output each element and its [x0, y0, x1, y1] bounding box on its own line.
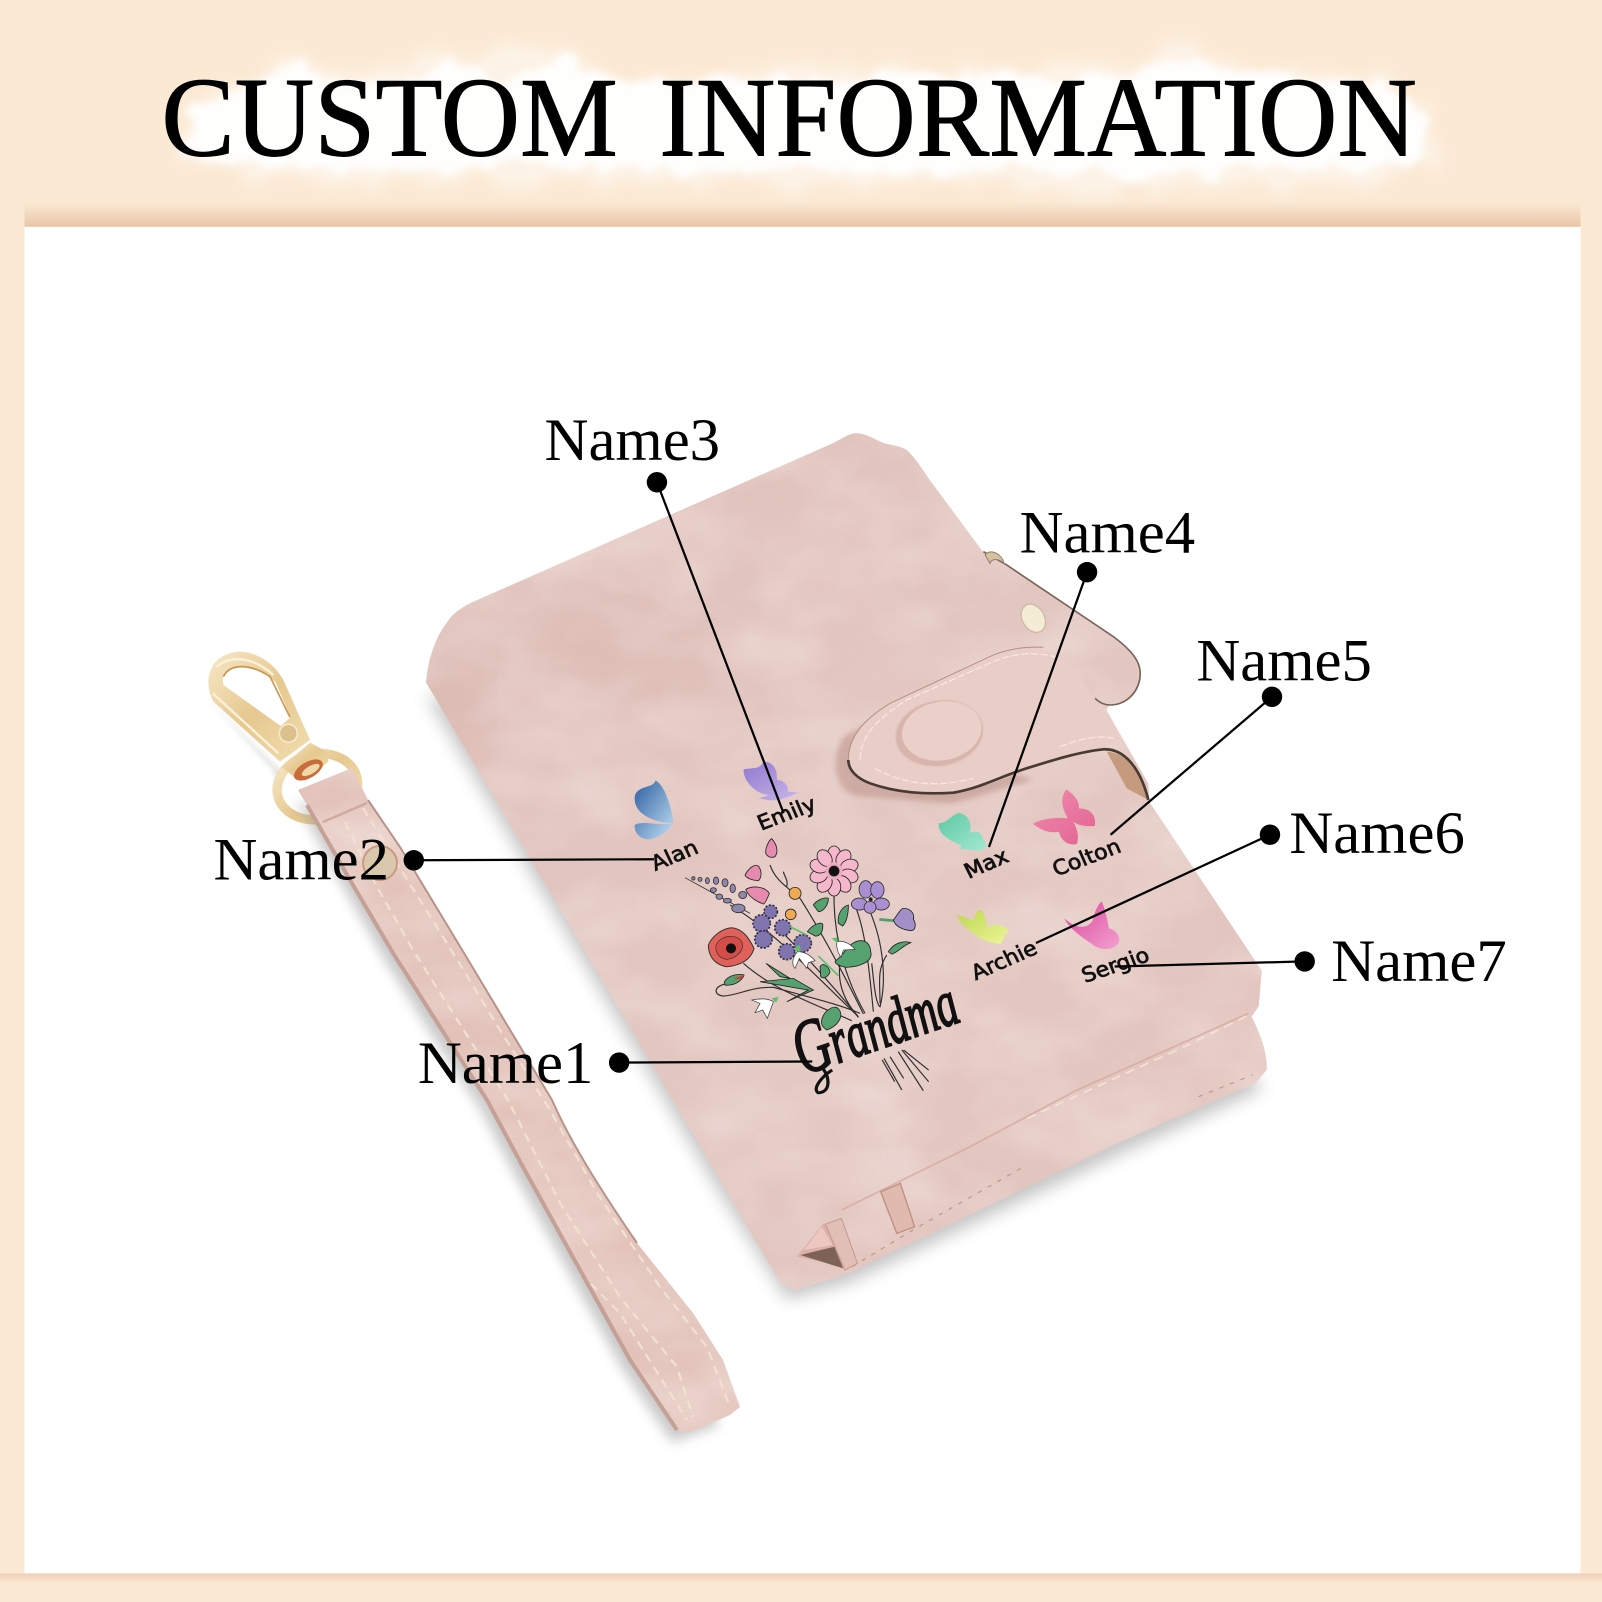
butterfly: Alan	[635, 781, 673, 839]
metal ring	[985, 552, 1004, 563]
title glow: white cloud	[184, 53, 1425, 176]
wallet shadow	[426, 695, 1263, 1300]
orange buds	[785, 887, 801, 920]
wallet body	[426, 433, 1267, 1290]
button	[897, 695, 986, 767]
snap hook	[208, 652, 310, 762]
butterfly: Archie	[957, 910, 1009, 944]
strap rivet	[363, 846, 397, 880]
leather texture	[419, 429, 1277, 1298]
rivet	[279, 724, 297, 742]
name: Colton: Colton	[1049, 835, 1125, 882]
gold clasp	[205, 652, 364, 827]
strap dark right edge	[368, 800, 637, 1243]
callout: Name7	[1115, 928, 1507, 995]
white snowdrops	[752, 941, 855, 1018]
callout: Name5: Name5	[1196, 627, 1372, 694]
callout: Name1: Name1	[418, 1030, 593, 1097]
wallet	[419, 429, 1277, 1300]
shaded band above panel	[25, 202, 1581, 228]
bouquet	[685, 839, 915, 1030]
lower stitching	[852, 1075, 1252, 1267]
callout: Name5	[1111, 627, 1372, 835]
callout: Name4: Name4	[1020, 500, 1195, 567]
butterfly: Colton	[1033, 789, 1095, 844]
inner gap	[1107, 752, 1148, 800]
bottom panel edge shade	[0, 1573, 1602, 1584]
pink buds	[745, 839, 777, 904]
name: Alan: Alan	[647, 836, 702, 876]
ring	[271, 746, 364, 827]
strap shadow	[296, 800, 720, 1442]
snap rivet	[1016, 600, 1050, 637]
strap stitching	[345, 808, 730, 1420]
callout: Name6	[1036, 800, 1465, 943]
red poppy	[708, 928, 754, 967]
fold line	[841, 1013, 1249, 1210]
name: Grandma: Grandma	[779, 958, 969, 1091]
clasp shadow	[205, 697, 283, 790]
swivel	[282, 743, 328, 780]
callouts	[214, 407, 1507, 1097]
tab shadow	[836, 697, 1033, 803]
violet flower	[851, 881, 889, 913]
name: Max: Max	[960, 844, 1013, 884]
bright green stalks	[790, 927, 838, 976]
corner fold	[797, 1223, 847, 1267]
callout: Name3: Name3	[545, 407, 720, 474]
bud red tip	[733, 975, 744, 979]
callout: Name2	[214, 827, 654, 894]
bouquet tie lines	[882, 1050, 929, 1091]
tab top edge	[848, 647, 1043, 760]
side purple bell	[879, 908, 915, 931]
corner pink gusset	[804, 1227, 832, 1250]
callout: Name1	[418, 1030, 812, 1097]
callout: Name4	[989, 500, 1195, 847]
tab stitching	[860, 654, 1113, 784]
strap dark left edge	[307, 805, 677, 1430]
name: Archie: Archie	[967, 936, 1041, 986]
butterfly: Sergio	[1064, 902, 1119, 949]
name: Sergio: Sergio	[1078, 943, 1153, 988]
title: CUSTOM INFORMATION	[161, 55, 1417, 181]
lavender sprig	[685, 877, 750, 913]
hook amber inner rim	[223, 667, 290, 717]
swivel inner	[291, 755, 326, 785]
butterfly: Max	[939, 813, 988, 851]
butterfly: Emily	[744, 762, 798, 800]
corner dark pocket	[800, 1247, 843, 1268]
callout: Name2: Name2	[214, 827, 389, 894]
corner band	[825, 1218, 857, 1270]
button shadow	[890, 693, 988, 773]
printed names	[647, 792, 1153, 988]
wrist strap	[290, 760, 750, 1442]
strap loop large	[881, 1183, 915, 1233]
strap top seam	[323, 803, 367, 822]
tab dark edge	[848, 749, 1148, 800]
title glow: faint outer cloud	[179, 39, 1435, 192]
Grandma loop swash	[816, 1067, 832, 1093]
lower wallet details	[797, 1013, 1252, 1270]
tab, button and hardware	[836, 552, 1148, 803]
upper edge dark line	[983, 552, 1140, 705]
name: Emily: Emily	[754, 792, 820, 836]
strap texture	[290, 760, 750, 1440]
callout: Name3	[545, 407, 784, 813]
green leaves	[724, 898, 911, 1030]
printed names, butterflies and title	[635, 762, 1153, 1093]
flap stitching	[1027, 1015, 1249, 1118]
callout: Name7: Name7	[1331, 928, 1507, 995]
small green caps	[772, 937, 837, 1003]
tab fill	[848, 649, 1120, 794]
bouquet stems	[716, 865, 887, 1021]
hook highlight	[213, 659, 278, 753]
darker patches	[574, 628, 682, 673]
pink daisy	[808, 846, 860, 896]
purple cluster flowers	[753, 905, 811, 960]
callout: Name6: Name6	[1289, 800, 1465, 867]
strap body	[298, 768, 740, 1433]
